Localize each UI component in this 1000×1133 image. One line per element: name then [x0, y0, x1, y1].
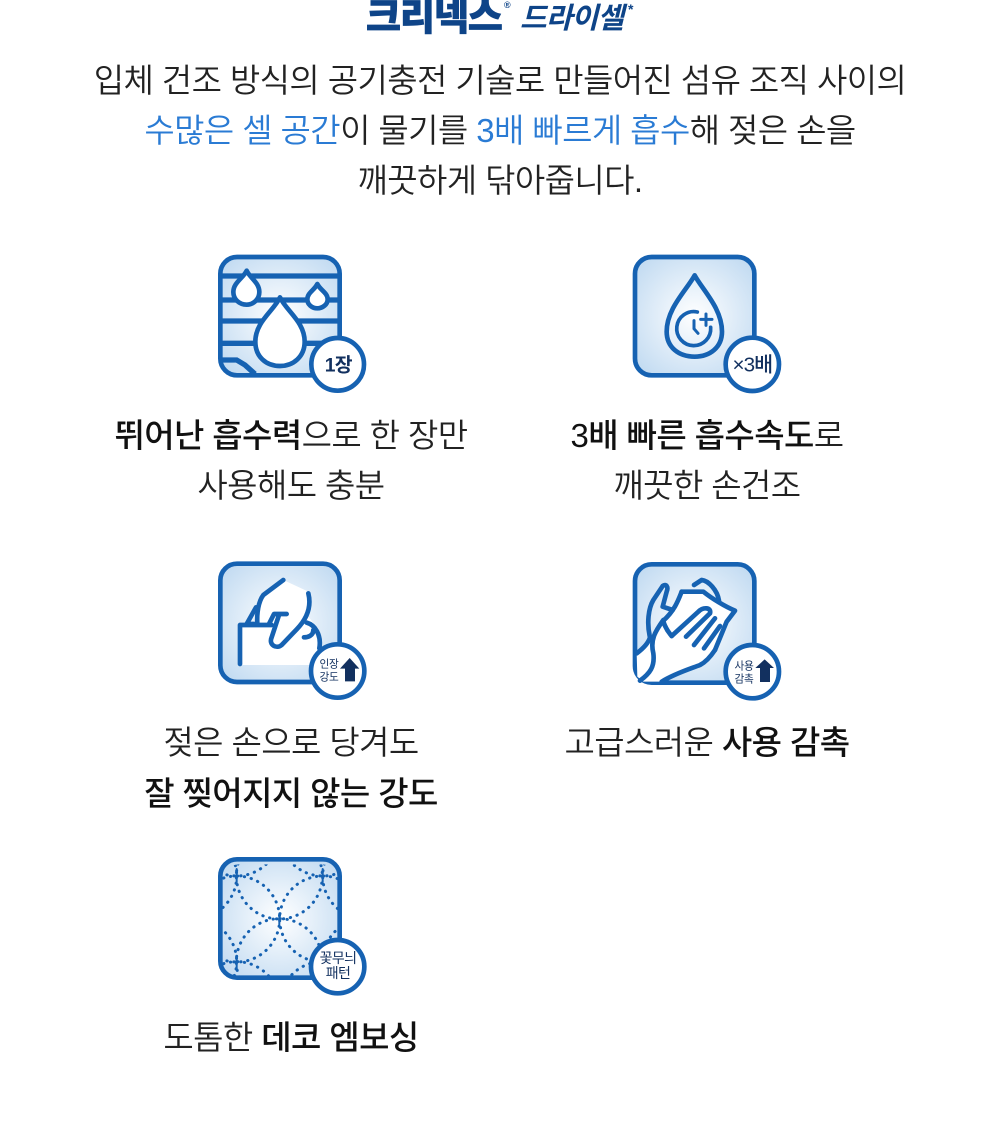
logo: Kleenex Dry Cell: [366, 0, 634, 39]
feature text: strength: 잘 찢어지지 않는 강도: [144, 775, 438, 812]
icon: absorbency, one sheet: [218, 254, 366, 393]
feature text: strength: 젖은 손으로 당겨도: [163, 724, 419, 761]
feature text: absorbency: 사용해도 충분: [197, 467, 385, 504]
feature text: speed: 깨끗한 손건조: [613, 467, 801, 504]
icon: flower pattern: 패턴: [326, 965, 350, 981]
icon: wet strength: [218, 561, 367, 700]
intro text: 수많은 셀 공간이 물기를 3배 빠르게 흡수해 젖은 손을: [144, 112, 856, 149]
feature text: speed: 3배 빠른 흡수속도로: [570, 417, 843, 454]
icon: 3x faster absorption: [632, 254, 782, 394]
icon: flower pattern: [218, 857, 367, 996]
logo: Kleenex Dry Cell: ®: [504, 0, 511, 10]
icon: flower pattern: 꽃무늬: [320, 950, 356, 966]
icon: premium feel: 감촉: [735, 674, 754, 686]
intro text: 입체 건조 방식의 공기충전 기술로 만들어진 섬유 조직 사이의: [94, 62, 906, 99]
logo: Kleenex Dry Cell: *: [628, 1, 633, 17]
feature text: absorbency: [114, 417, 468, 504]
icon: wet strength: 인장: [320, 658, 339, 670]
icon: 3x faster absorption: ×3배: [733, 353, 772, 376]
feature text: strength: [144, 724, 438, 812]
feature text: premium feel: 고급스러운 사용 감촉: [564, 724, 849, 761]
icon: absorbency, one sheet: 1장: [325, 354, 353, 376]
logo: Kleenex Dry Cell: 드라이셀: [520, 3, 623, 35]
feature text: emboss: 도톰한 데코 엠보싱: [163, 1019, 419, 1056]
feature text: speed: [570, 417, 843, 504]
feature text: absorbency: 뛰어난 흡수력으로 한 장만: [114, 417, 468, 454]
icon: premium feel: [632, 562, 782, 701]
intro text: [94, 62, 906, 199]
intro text: 깨끗하게 닦아줍니다.: [358, 162, 642, 199]
icon: wet strength: 강도: [320, 672, 339, 684]
icon: premium feel: 사용: [735, 660, 754, 672]
